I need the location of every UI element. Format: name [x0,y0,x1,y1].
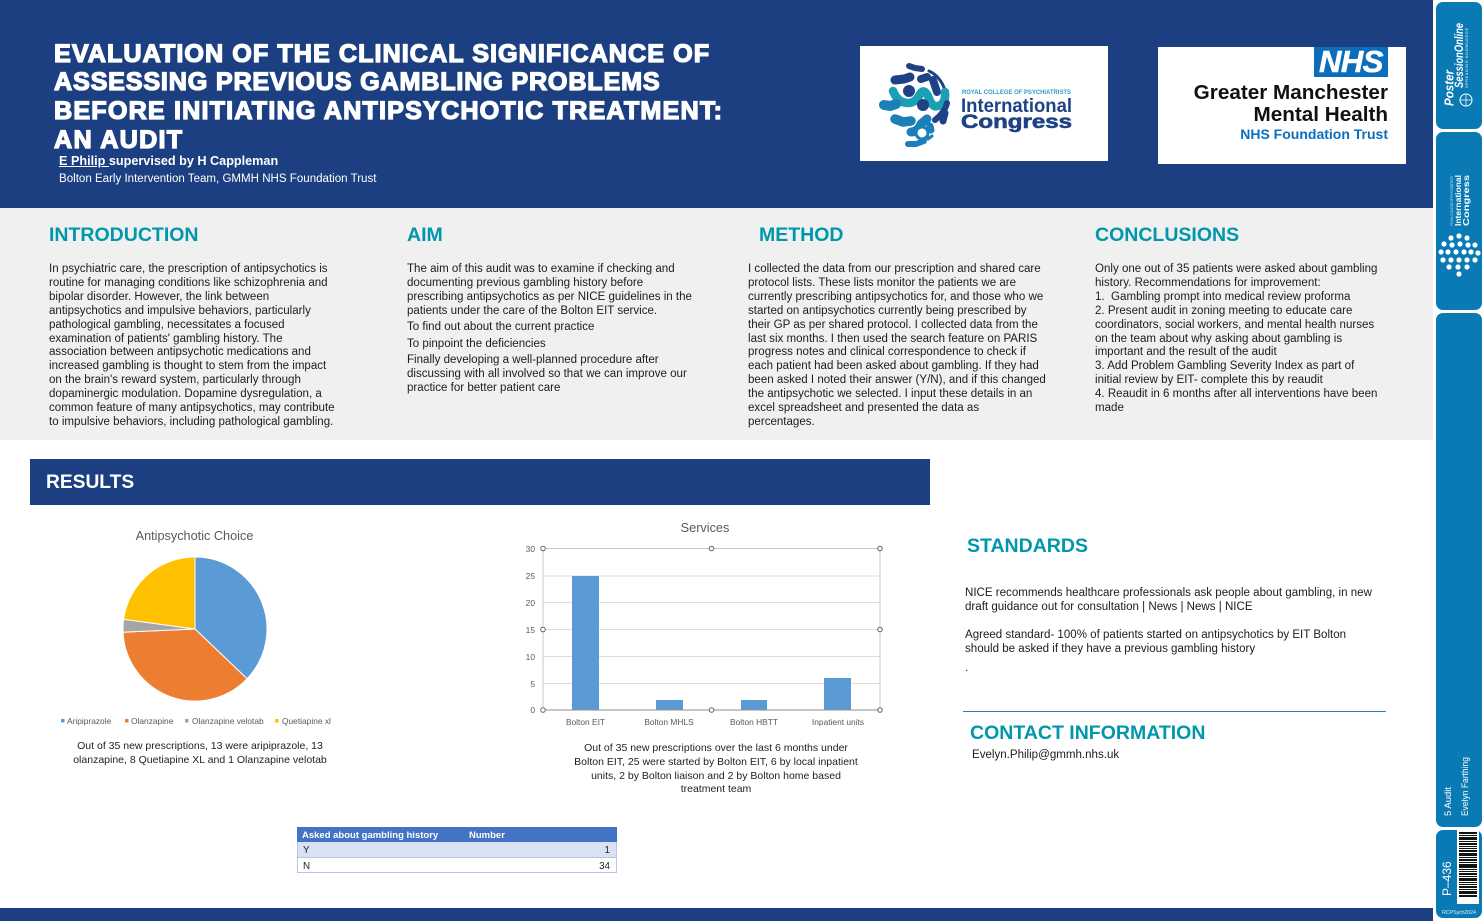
bar chart: services: 15 [526,625,535,635]
text: introduction: common feature of many antipsychotics, may contribute [49,402,335,414]
text: aim: prescribing antipsychotics as per NICE guidelines in the [407,291,692,303]
text: method: protocol lists. These lists monitor the patients we are [748,277,1016,289]
heading: standards: STANDARDS [967,535,1088,557]
text: aim [407,263,692,394]
text: method [748,263,1046,428]
text: method: each patient had been asked about gambling. If they had [748,360,1039,372]
logo: International Congress: Congress [961,112,1072,133]
text: method: started on antipsychotics currently being prescribed by [748,305,1027,317]
text: conclusions: on the team about why asking about gambling is [1095,333,1342,345]
text: method: percentages. [748,416,815,428]
text: standards: draft guidance out for consultation | News | News | NICE Agreed standard- 100% of patients started on antipsychotics by EIT Bolton [965,601,1346,641]
caption: pie chart [73,740,327,766]
bar chart: services: Bolton MHLS [644,717,694,727]
text: method: their GP as per shared protocol. I collected data from the [748,319,1038,331]
text: aim: documenting previous gambling history before [407,277,643,289]
divider [963,711,1386,712]
bar chart: services: 20 [526,598,535,608]
logo: Greater Manchester Mental Health NHS: Mental Health [1254,103,1388,126]
text: standards [965,587,1372,674]
pie chart: antipsychotic choice: Quetiapine xl [282,716,331,726]
text: aim: discussing with all involved so that we can improve our [407,368,687,380]
logo: Greater Manchester Mental Health NHS [1158,47,1406,164]
text: introduction: routine for managing conditions like schizophrenia and [49,277,328,289]
pie chart: antipsychotic choice: Olanzapine velotab [192,716,264,726]
tab: Poster Session Online: SPREADING KNOWLEDGE [1465,27,1469,88]
table: asked about gambling history: Number [469,830,505,841]
bar chart: services: 0 [530,705,535,715]
logo: International Congress [860,46,1108,161]
title: BEFORE INITIATING ANTIPSYCHOTIC TREATMENT: [54,97,723,125]
bar chart: services: 10 [526,652,535,662]
icon: NHS lozenge: NHS [1319,44,1383,79]
text: conclusions: 3. Add Problem Gambling Severity Index as part of [1095,360,1354,372]
text: method: progress notes and clinical correspondence to check if [748,346,1026,358]
text: conclusions: 4. Reaudit in 6 months after all interventions have been [1095,388,1377,400]
affiliation: Bolton Early Intervention Team, GMMH NHS Foundation Trust [59,173,376,185]
caption: pie chart: Out of 35 new prescriptions, 13 were aripiprazole, 13 [77,740,323,752]
tab: poster number and barcode [1436,830,1482,918]
heading: method: METHOD [759,224,844,246]
tab: International Congress: International [1453,175,1463,226]
pie chart: antipsychotic choice [61,529,331,726]
bar chart: services: Inpatient units [812,717,864,727]
text: aim: patients under the care of the Bolton EIT service. To find out about the current practice To pinpoint the deficiencies Finally developing a well-planned procedure after [407,305,659,366]
tab: poster number and barcode: P–436 [1440,861,1454,896]
pie chart: antipsychotic choice: Olanzapine [131,716,174,726]
text: conclusions: Only one out of 35 patients were asked about gambling [1095,263,1377,275]
tab: session and author: 5 Audit [1443,787,1454,816]
text: introduction: examination of patients' gambling history. The [49,333,282,345]
text: introduction: association between antipsychotic medications and [49,346,311,358]
text: conclusions: history. Recommendations for improvement: [1095,277,1321,289]
text: method: currently prescribing antipsychotics for, and those who we [748,291,1043,303]
tab: session and author: Evelyn Farthing [1460,757,1471,816]
authors: E Philip supervised by H Cappleman [59,154,278,168]
table: asked about gambling history: Y [303,845,310,856]
title [54,40,723,154]
text: standards: should be asked if they have a previous gambling history . [965,643,1255,674]
text: conclusions: made [1095,402,1124,414]
text: introduction: to impulsive behaviors, including pathological gambling. [49,416,333,428]
text: conclusions [1095,263,1377,414]
heading: contact information: CONTACT INFORMATION [970,722,1205,744]
text: contact email: Evelyn.Philip@gmmh.nhs.uk [972,749,1119,761]
text: introduction: dopaminergic modulation. Dopamine dysregulation, a [49,388,322,400]
footer band [0,908,1433,921]
text: introduction: on the brain's reward system, particularly through [49,374,301,386]
text: conclusions: coordinators, social workers, and mental health nurses [1095,319,1374,331]
sidebar tabs [1436,2,1482,918]
text: introduction [49,263,335,428]
table: asked about gambling history: N [303,861,310,872]
logo: Greater Manchester Mental Health NHS: Greater Manchester [1194,81,1388,104]
text: aim: The aim of this audit was to examine if checking and [407,263,675,275]
text: introduction: bipolar disorder. However, the link between [49,291,269,303]
caption: pie chart: olanzapine, 8 Quetiapine XL and 1 Olanzapine velotab [73,754,327,766]
panel: aim [407,224,692,394]
text: method: I collected the data from our prescription and shared care [748,263,1041,275]
tab: International Congress: ROYAL COLLEGE OF PSYCHIATRISTS [1450,176,1454,226]
tab: poster number and barcode: RCPSych2024 [1442,910,1476,916]
bar chart: services: Services [681,521,729,535]
results heading bar: RESULTS [46,472,134,493]
heading: conclusions: CONCLUSIONS [1095,224,1239,246]
bar chart: services: 30 [526,544,535,554]
text: method: excel spreadsheet and presented the data as [748,402,979,414]
tab: Poster Session Online [1436,2,1482,129]
caption: bar chart: treatment team [681,783,751,795]
title: AN AUDIT [54,126,183,154]
logo: International Congress: International [961,96,1072,117]
bar chart: services: Bolton EIT [566,717,605,727]
tab: Poster Session Online: SessionOnline [1452,23,1466,88]
bar chart: services [526,521,883,727]
logo: International Congress: ROYAL COLLEGE OF PSYCHIATRISTS [962,89,1071,96]
tab: International Congress [1436,132,1482,310]
tab: session and author [1436,313,1482,827]
panel: introduction [49,224,335,428]
table: asked about gambling history: 34 [599,861,610,872]
panel: contact information [970,722,1205,761]
results heading bar [30,459,930,505]
grey panel band [0,208,1433,440]
title: ASSESSING PREVIOUS GAMBLING PROBLEMS [54,68,660,96]
bar chart: services: 25 [526,571,535,581]
panel: standards [965,535,1372,674]
text: method: the antipsychotic we selected. I input these details in an [748,388,1032,400]
heading: introduction: INTRODUCTION [49,224,198,246]
text: aim: practice for better patient care [407,382,560,394]
pie chart: antipsychotic choice: Aripiprazole [67,716,112,726]
bar chart: services: Bolton HBTT [730,717,778,727]
heading: aim: AIM [407,224,443,246]
header band [0,0,1433,208]
caption: bar chart: Bolton EIT, 25 were started by Bolton EIT, 6 by local inpatient [574,756,858,768]
tab: International Congress: Congress [1461,175,1471,226]
text: introduction: pathological gambling, necessitates a focused [49,319,285,331]
text: conclusions: important and the result of the audit [1095,346,1277,358]
logo: Greater Manchester Mental Health NHS: NHS Foundation Trust [1240,126,1388,142]
text: introduction: In psychiatric care, the prescription of antipsychotics is [49,263,328,275]
panel: conclusions [1095,224,1377,414]
title: EVALUATION OF THE CLINICAL SIGNIFICANCE OF [54,40,710,68]
text: method: been asked I noted their answer (Y/N), and if this changed [748,374,1046,386]
text: standards: NICE recommends healthcare professionals ask people about gambling, in new [965,587,1372,599]
pie chart: antipsychotic choice: Antipsychotic Choice [136,529,253,543]
text: conclusions: 1. Gambling prompt into medical review proforma [1095,291,1350,303]
text: introduction: antipsychotics and impulsive behaviors, particularly [49,305,311,317]
bar chart: services: 5 [530,679,535,689]
text: method: last six months. I then used the search feature on PARIS [748,333,1037,345]
caption: bar chart [574,742,858,795]
table: asked about gambling history [297,827,617,873]
text: conclusions: initial review by EIT- complete this by reaudit [1095,374,1323,386]
text: introduction: increased gambling is thought to stem from the impact [49,360,326,372]
table: asked about gambling history: 1 [605,845,610,856]
text: conclusions: 2. Present audit in zoning meeting to educate care [1095,305,1352,317]
table: asked about gambling history: Asked about gambling history [302,830,438,841]
caption: bar chart: units, 2 by Bolton liaison and 2 by Bolton home based [591,770,841,782]
caption: bar chart: Out of 35 new prescriptions over the last 6 months under [584,742,848,754]
tab: Poster Session Online: Poster [1442,69,1456,106]
panel: method [748,224,1046,428]
